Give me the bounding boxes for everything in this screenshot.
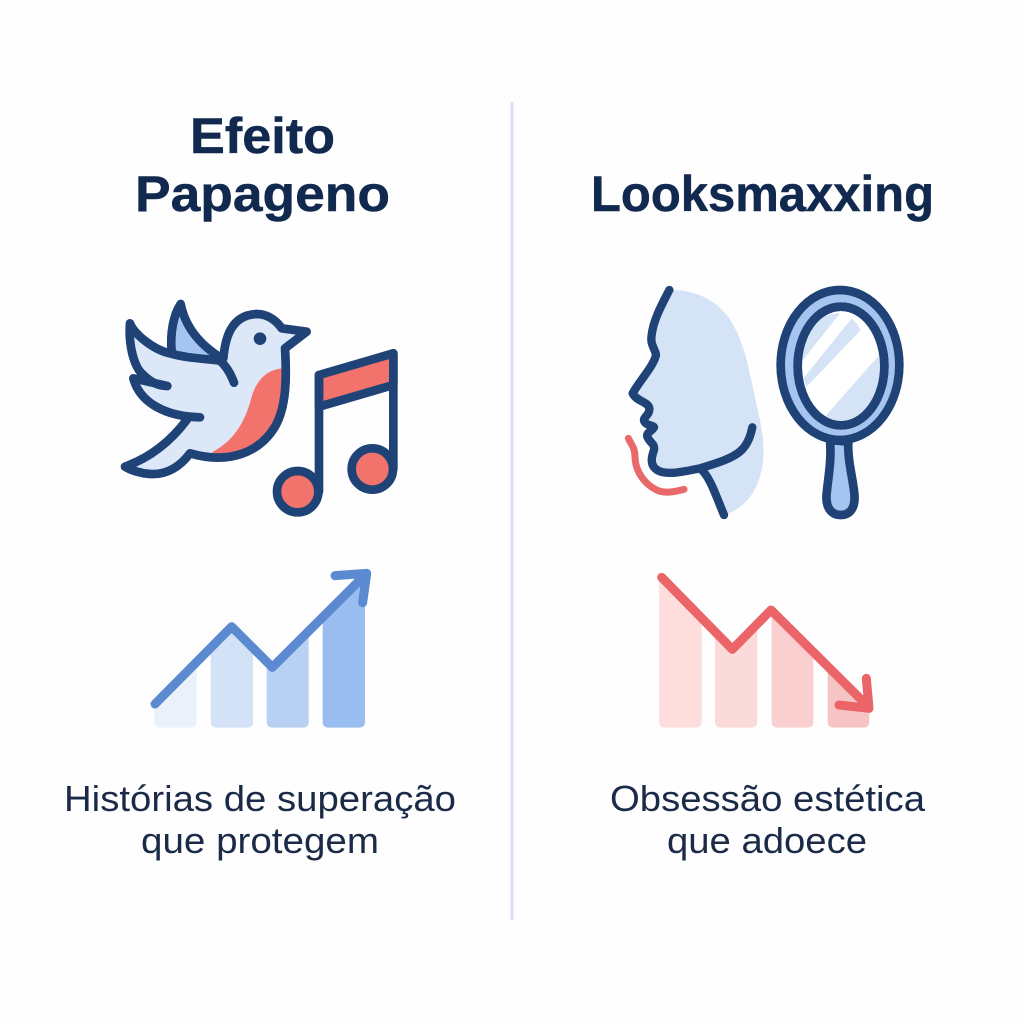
chart: falling bars with arrow <box>659 575 869 728</box>
title: Efeito Papageno <box>135 108 390 222</box>
text: Histórias de superação que protegem: que protegem <box>141 820 379 861</box>
icon: bird with music note <box>125 304 393 512</box>
panel: Efeito Papageno <box>64 108 456 861</box>
title: Looksmaxxing: Looksmaxxing <box>591 166 934 222</box>
text: Obsessão estética que adoece: que adoece <box>667 820 867 861</box>
text: Histórias de superação que protegem <box>64 778 456 861</box>
text: Obsessão estética que adoece <box>610 778 926 861</box>
title: Efeito Papageno: Papageno <box>135 166 390 222</box>
icon: hand mirror <box>781 290 899 515</box>
panel: Looksmaxxing <box>591 166 934 861</box>
icon: face profile <box>628 290 764 515</box>
text: Histórias de superação que protegem: Histórias de superação <box>64 778 456 819</box>
text: Obsessão estética que adoece: Obsessão estética <box>610 778 926 819</box>
title: Efeito Papageno: Efeito <box>190 108 335 164</box>
chart: rising bars with arrow <box>154 573 367 728</box>
